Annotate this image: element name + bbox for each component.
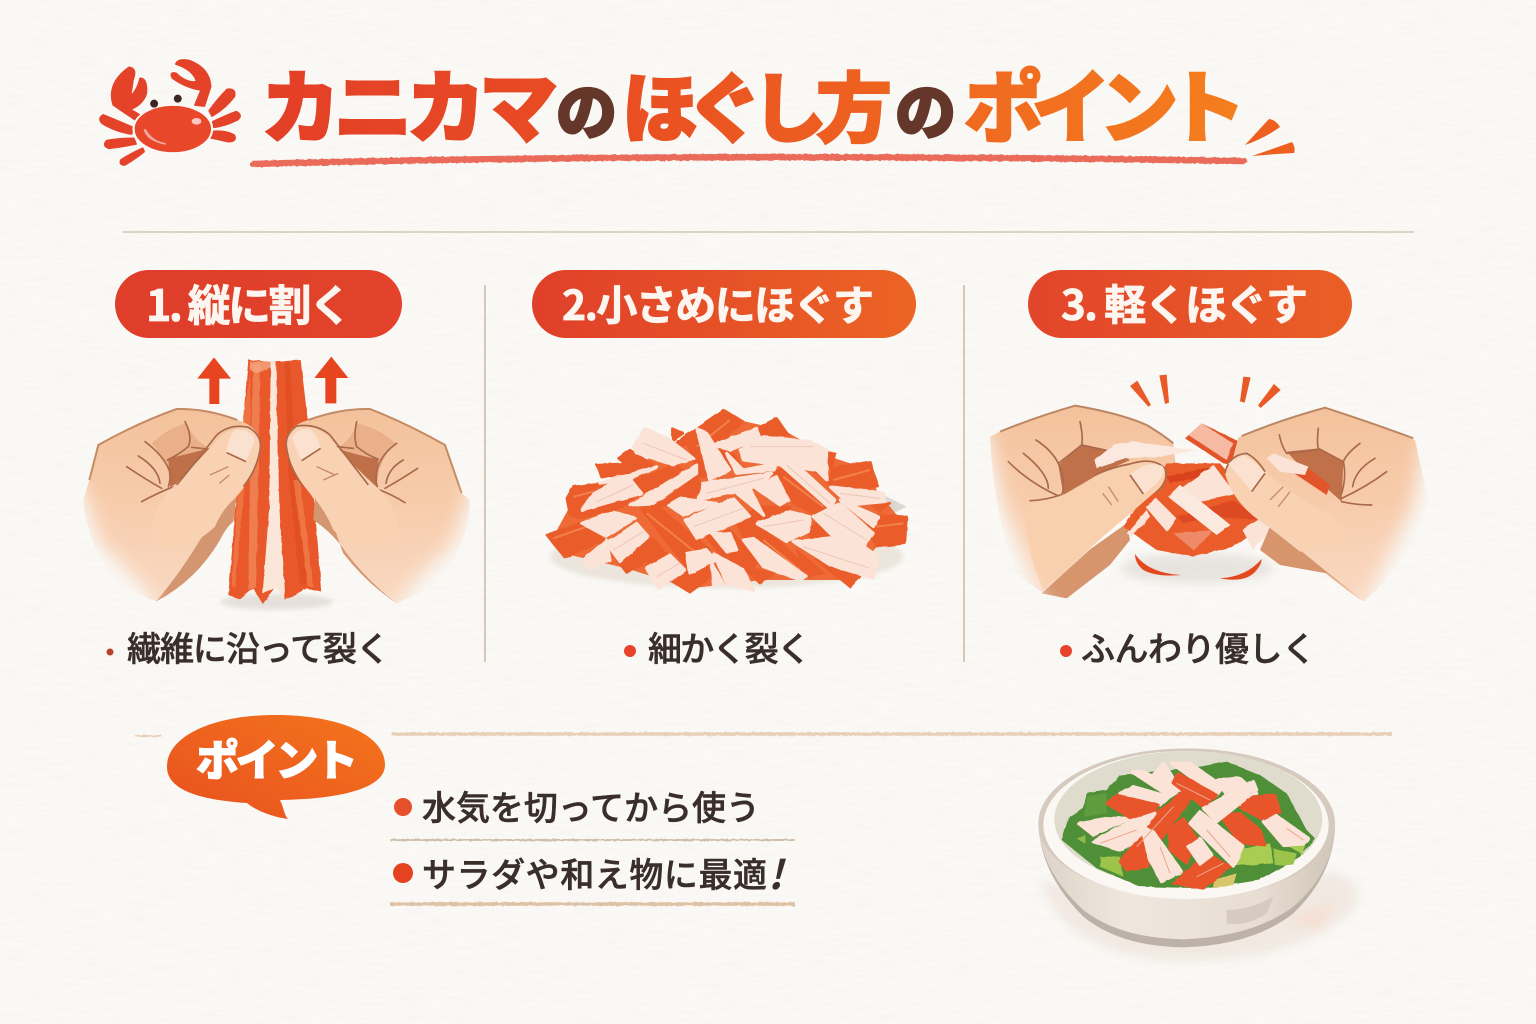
orange crab pieces (1107, 773, 1280, 888)
salad greens (1062, 762, 1315, 888)
title: ポイント (964, 44, 1246, 159)
icon: crab (100, 60, 240, 165)
point list (393, 781, 786, 901)
point list: 水気を切ってから使う (422, 781, 760, 830)
illustration: salad bowl (1038, 748, 1358, 961)
step 3 caption: ふんわり優しく (1081, 622, 1316, 671)
point speech bubble: ポイント (196, 727, 358, 789)
step 1 badge: 1. 縦に割く (146, 272, 352, 334)
title (261, 44, 1246, 159)
top divider (123, 231, 1414, 233)
illustration: hands loosening crab stick (990, 375, 1428, 602)
step 3 badge: 3. 軽くほぐす (1061, 272, 1308, 333)
step 2 badge: 2.小さめにほぐす (562, 272, 874, 332)
bowl shadow (1040, 872, 1358, 961)
crab pieces held between hands (1095, 423, 1330, 557)
left hand (990, 406, 1177, 598)
title: ほぐし方 (622, 48, 892, 158)
left hand (83, 409, 260, 602)
point list: サラダや和え物に最適 (422, 848, 767, 897)
step 1 caption: 繊維に沿って裂く (127, 622, 390, 671)
illustration: pile of shredded crab sticks (547, 410, 907, 592)
step 2 caption: 細かく裂く (648, 622, 811, 671)
icon: arrows up (197, 357, 348, 404)
crab stick (228, 360, 322, 604)
point list: ! (768, 843, 786, 901)
icon: title sparkle (1245, 119, 1295, 156)
orange pieces (547, 410, 907, 592)
point speech bubble (167, 715, 385, 819)
crab stick streaks (1100, 783, 1303, 877)
back white crab pieces (1078, 763, 1257, 835)
title underline (253, 157, 1244, 164)
white pieces (582, 428, 885, 590)
title: の (895, 63, 956, 152)
title: カニカマ (261, 44, 558, 159)
title: の (556, 63, 617, 152)
right hand (1225, 408, 1428, 602)
icon: motion marks (1130, 375, 1281, 580)
step 1 badge (115, 270, 402, 338)
point section rules (135, 734, 1392, 904)
illustration: hands splitting crab stick (83, 357, 470, 610)
right hand (286, 409, 470, 603)
white streaks (597, 443, 880, 577)
left thumb (1026, 461, 1166, 590)
step 3 badge (1028, 270, 1352, 338)
front white crab pieces (1093, 782, 1308, 882)
orange streaks (553, 420, 903, 570)
